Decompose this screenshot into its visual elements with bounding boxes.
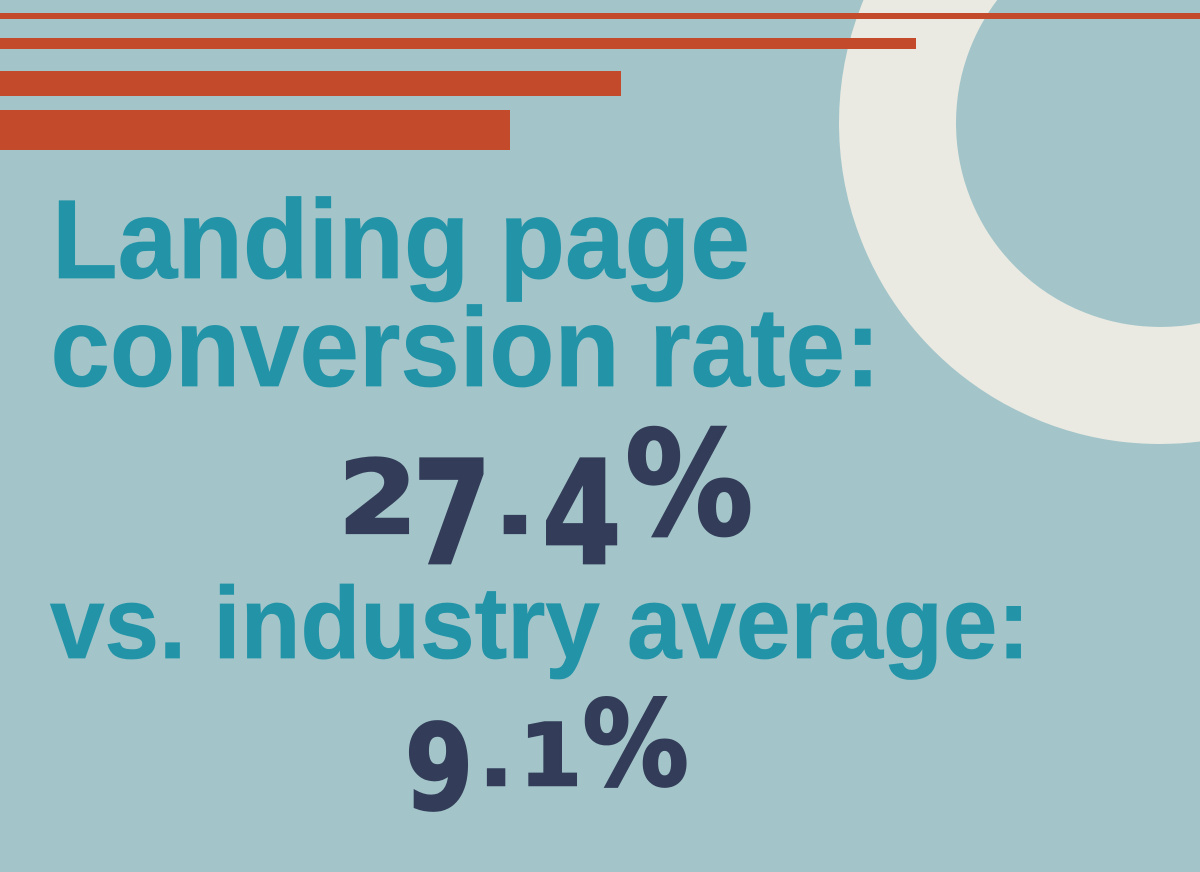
stat: 27.4%: 7 [413,431,491,597]
stat: 9.1%: 9 [405,699,473,837]
subheading: vs. industry average: vs. industry average: [50,566,1030,680]
stat: 27.4%: . [494,450,536,554]
stat: 27.4%: % [625,402,753,569]
stat: 27.4% [338,402,753,597]
stat: 9.1% [405,677,689,837]
stat: 27.4%: 2 [338,438,418,557]
heading: landing page conversion rate: Landing page [52,177,750,302]
bars [0,13,1200,150]
heading: landing page conversion rate [50,177,880,410]
stat: 27.4%: 4 [542,431,621,597]
stat: 9.1%: % [582,677,689,813]
decorative ring [898,0,1200,386]
stat: 9.1%: 1 [519,705,582,805]
heading: landing page conversion rate: conversion rate: [50,285,880,410]
stat: 9.1%: . [479,710,513,805]
